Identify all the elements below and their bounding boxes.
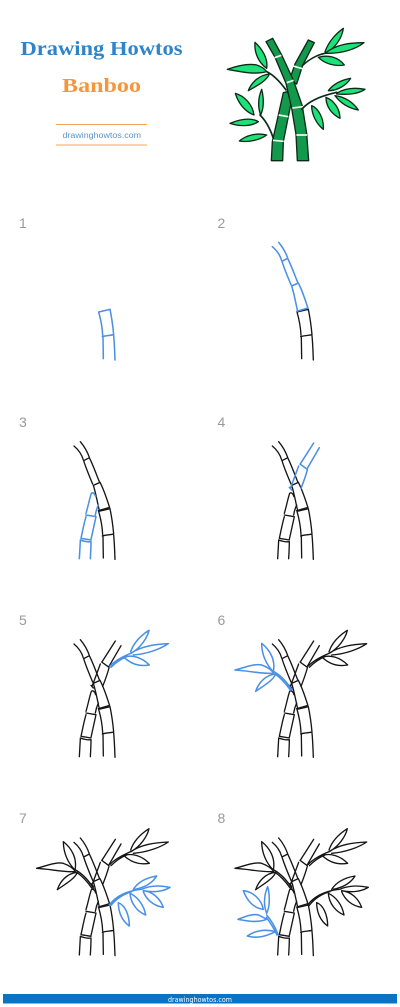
step number 8: 8 [218, 810, 226, 826]
drawing: second stalk lower part [74, 442, 115, 559]
panel: step 6 [218, 612, 367, 757]
drawing: upper left branch [235, 630, 367, 757]
step number 7: 7 [19, 810, 27, 826]
drawing: upper right branch [74, 630, 168, 757]
drawing: lower right branch [37, 829, 170, 956]
step number 3: 3 [19, 414, 27, 430]
panel: step 8 [218, 810, 368, 956]
panel: step 1 [19, 215, 115, 360]
drawing: stalk extended upward [272, 242, 313, 360]
illustration: finished green bamboo [227, 28, 365, 161]
bamboo trunks [266, 38, 314, 161]
leaves and branches [227, 28, 365, 141]
drawing: first stalk segments [99, 309, 115, 360]
panel: step 5 [19, 612, 168, 757]
subtitle: Banboo: Banboo [62, 75, 141, 97]
panel: step 7 [19, 810, 170, 956]
panel: step 2 [218, 215, 313, 360]
step number 5: 5 [19, 612, 27, 628]
title: Drawing Howtos: Drawing Howtos [20, 38, 183, 60]
step number 6: 6 [218, 612, 226, 628]
drawing: lower left branch [235, 829, 368, 956]
website link block [56, 124, 147, 145]
panel: step 4 [218, 414, 319, 559]
panel: step 3 [19, 414, 115, 559]
website link block: drawinghowtos.com [62, 131, 141, 140]
footer bar: drawinghowtos.com [168, 996, 232, 1004]
step number 2: 2 [218, 215, 226, 231]
step number 4: 4 [218, 414, 226, 430]
step number 1: 1 [19, 215, 27, 231]
drawing: second stalk upper part [272, 442, 319, 559]
footer bar [3, 994, 397, 1004]
